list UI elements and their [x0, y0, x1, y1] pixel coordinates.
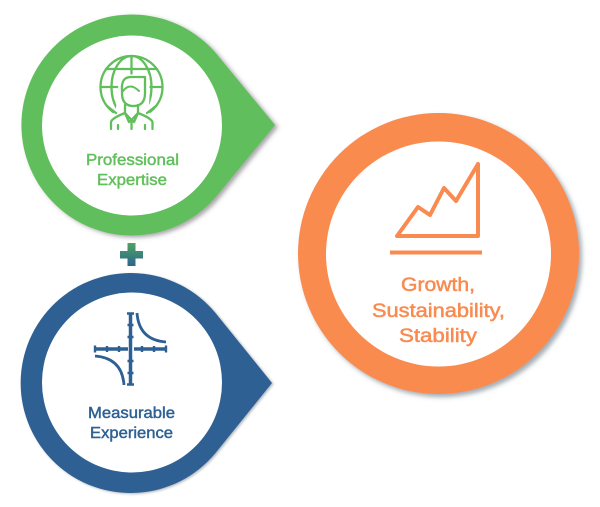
- panel: professional expertise: [21, 15, 275, 236]
- icon: growth chart: [390, 164, 482, 252]
- icon: plus sign: [120, 243, 143, 266]
- label: measurable experience: [88, 405, 175, 442]
- blue teardrop ring: [21, 273, 272, 493]
- icon: globe with person: [100, 56, 162, 131]
- label: professional expertise: Expertise: [97, 172, 167, 189]
- label: growth sustainability stability: [372, 275, 505, 347]
- label: growth sustainability stability: Growth,: [401, 275, 475, 296]
- inner white circle: [326, 142, 551, 366]
- green teardrop ring: [21, 15, 275, 236]
- label: growth sustainability stability: Sustainability,: [372, 301, 505, 322]
- inner white circle: [42, 36, 222, 216]
- label: measurable experience: Experience: [90, 425, 173, 442]
- label: professional expertise: Professional: [86, 152, 179, 169]
- inner white circle: [42, 292, 222, 472]
- orange ring: [298, 113, 579, 394]
- panel: measurable experience: [21, 273, 272, 493]
- label: growth sustainability stability: Stability: [399, 326, 478, 347]
- panel: growth sustainability stability: [298, 113, 579, 394]
- label: measurable experience: Measurable: [88, 405, 175, 422]
- label: professional expertise: [86, 152, 179, 189]
- icon: axes with hyperbola curves: [95, 313, 166, 385]
